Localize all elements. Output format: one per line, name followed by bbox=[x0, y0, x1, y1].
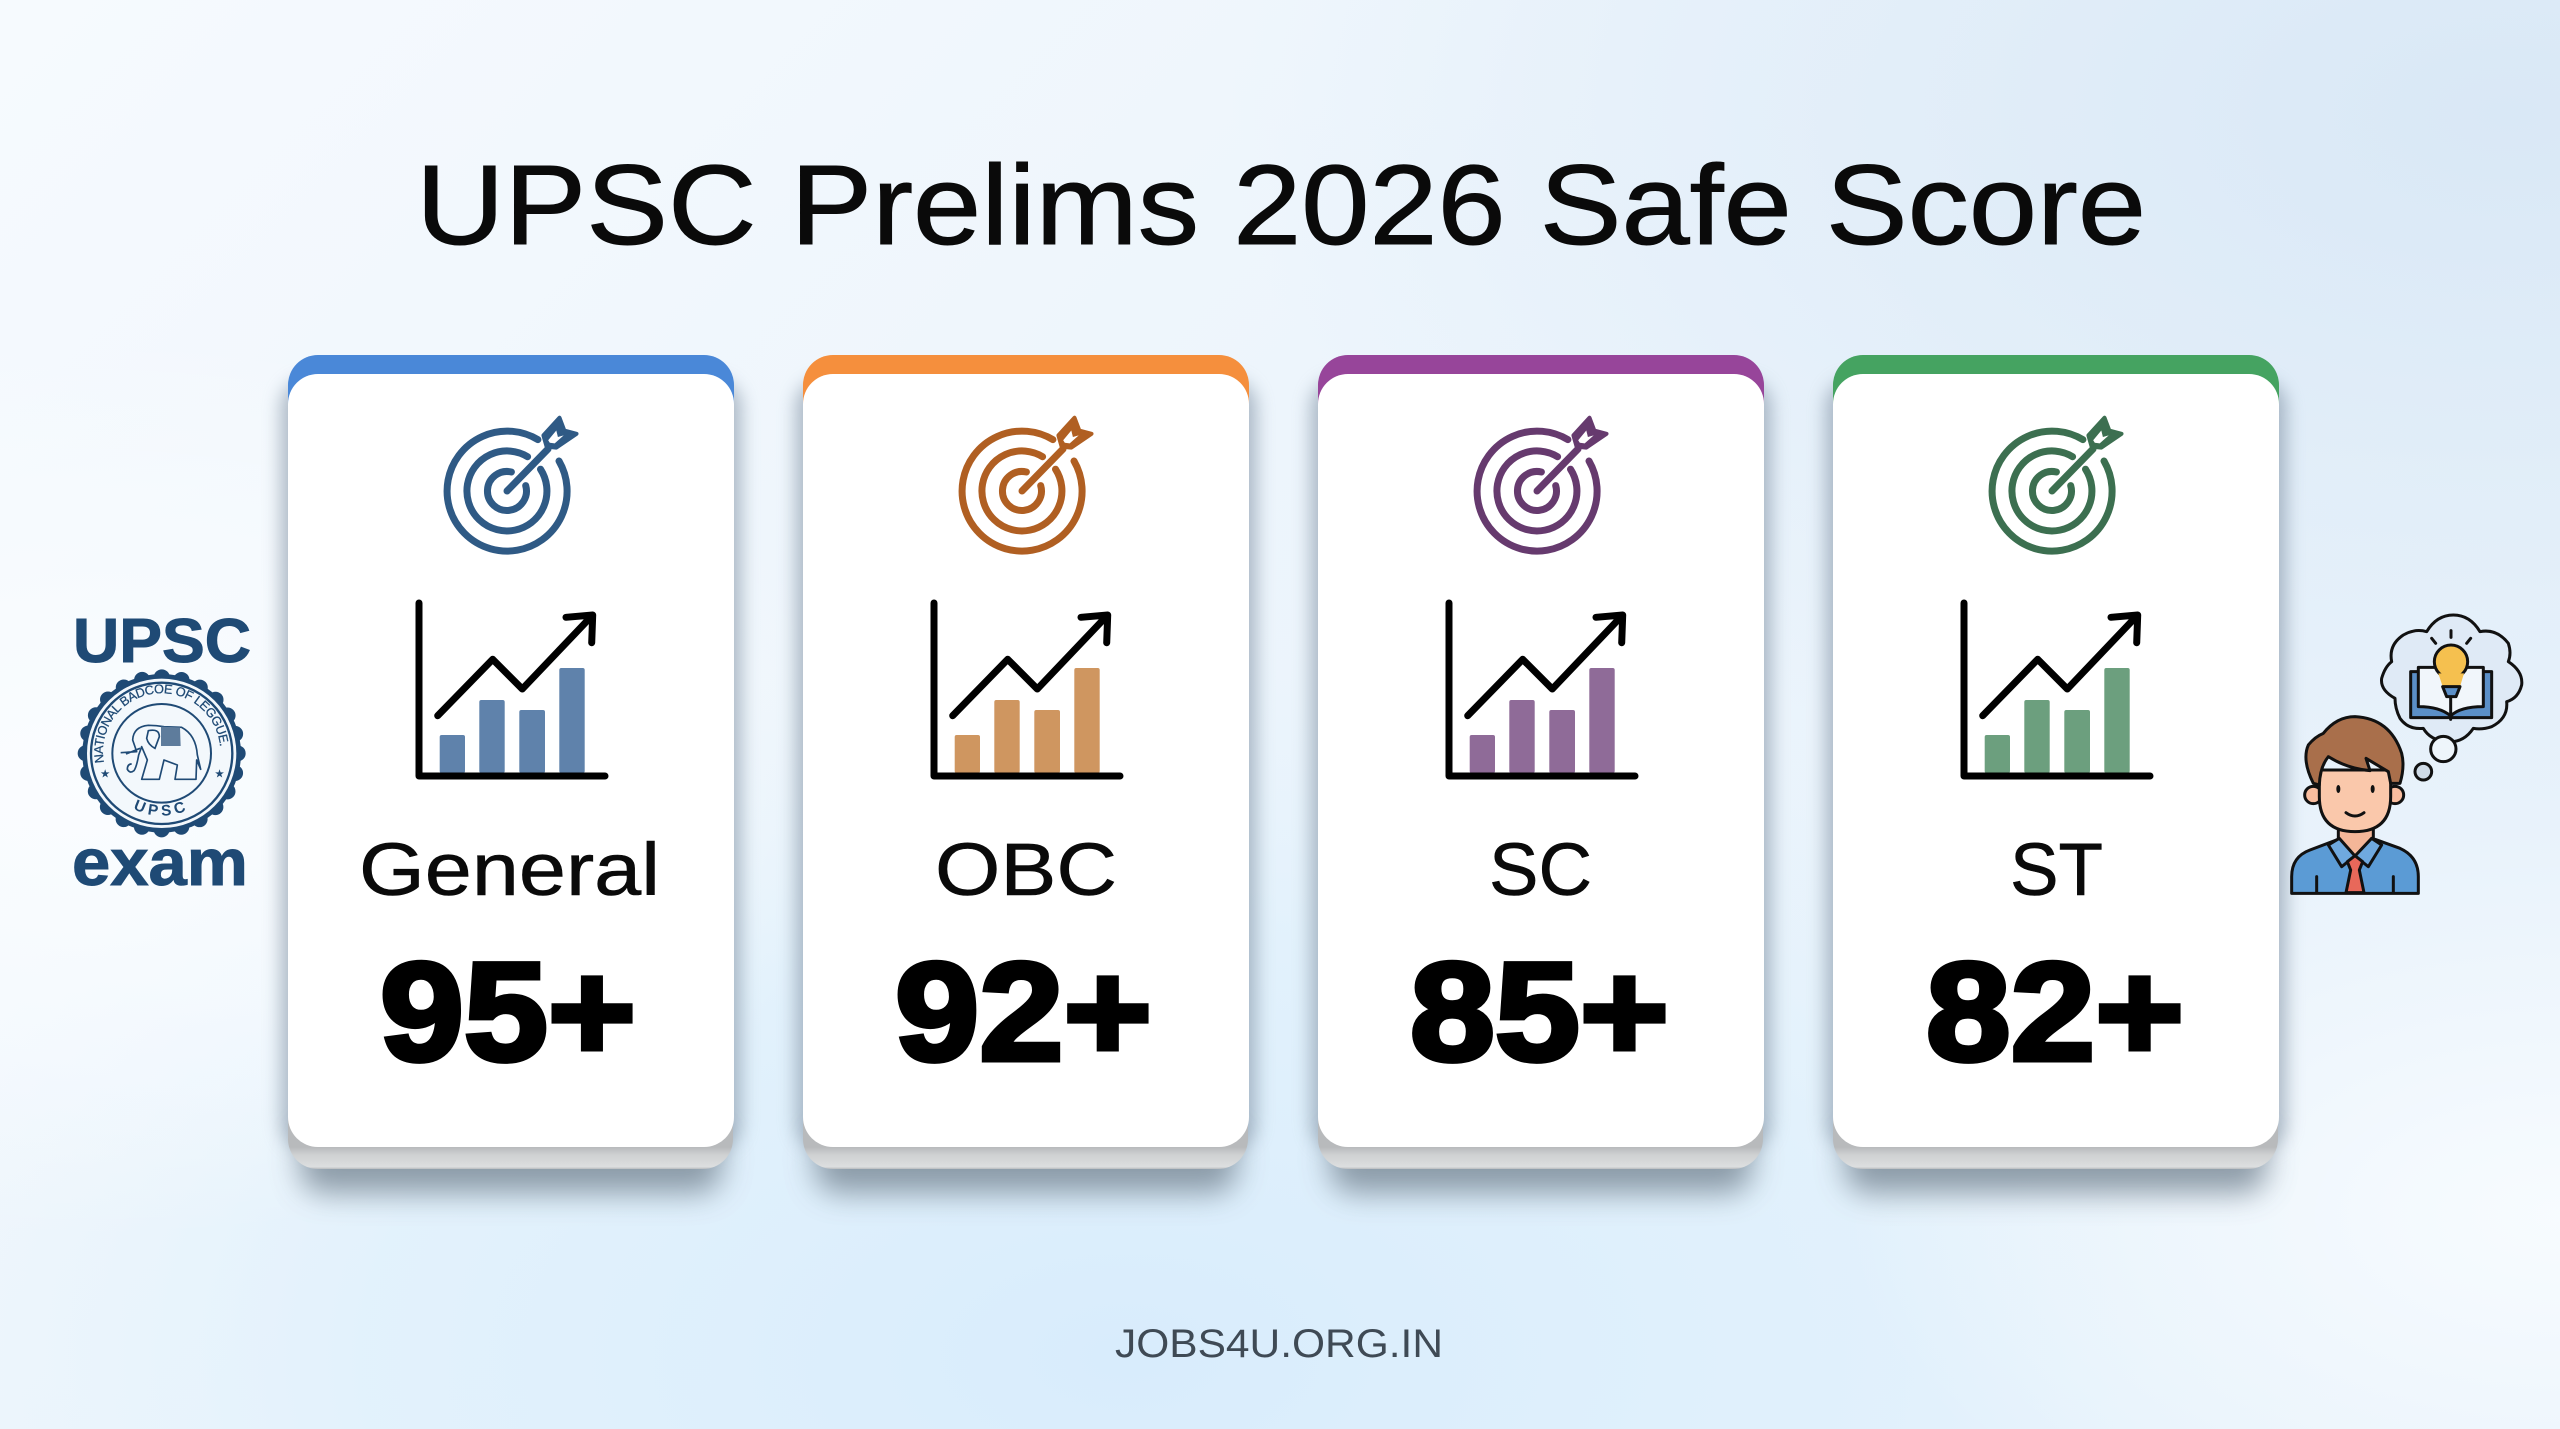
card shadow bbox=[1311, 380, 1771, 1193]
logo word: UPSC: UPSC bbox=[73, 607, 251, 676]
card face bbox=[1318, 374, 1764, 1147]
card base edge bbox=[1833, 500, 2278, 1169]
neck and collar bbox=[2338, 823, 2373, 857]
icon: target bbox=[962, 418, 1092, 551]
icon: elephant seal: UPSC bbox=[134, 800, 185, 816]
card shadow bbox=[1826, 380, 2286, 1193]
icon: target bbox=[1992, 418, 2122, 551]
icon: bar chart with trend arrow bbox=[934, 603, 1120, 776]
card shadow bbox=[281, 380, 741, 1193]
hair bbox=[2306, 717, 2403, 785]
eyes and smile bbox=[2336, 785, 2340, 793]
title: UPSC Prelims 2026 Safe Score bbox=[416, 142, 2146, 268]
panel: SC card bbox=[1311, 355, 1771, 1193]
thought bubbles bbox=[2415, 736, 2456, 780]
card base edge bbox=[1318, 500, 1763, 1169]
ears bbox=[2305, 786, 2322, 804]
footer: website: JOBS4U.ORG.IN bbox=[1115, 1322, 1443, 1366]
card face bbox=[1833, 374, 2279, 1147]
icon: target bbox=[1477, 418, 1606, 551]
icon: elephant seal: ★ bbox=[100, 768, 110, 780]
card face bbox=[288, 374, 734, 1147]
logo word: exam: exam bbox=[72, 825, 248, 899]
face bbox=[2319, 770, 2391, 832]
accent bar bbox=[288, 355, 734, 475]
book and light bulb bbox=[2411, 631, 2492, 719]
icon: bar chart with trend arrow bbox=[1964, 603, 2150, 776]
accent bar bbox=[803, 355, 1249, 475]
card base edge bbox=[288, 500, 733, 1169]
icon: bar chart with trend arrow bbox=[1449, 603, 1635, 776]
score: 85+ bbox=[1410, 933, 1669, 1090]
category label: General bbox=[359, 828, 660, 911]
icon: bar chart with trend arrow bbox=[419, 603, 605, 776]
panel: General card bbox=[281, 355, 741, 1193]
card shadow bbox=[796, 380, 1256, 1193]
card face bbox=[803, 374, 1249, 1147]
icon: elephant seal: NATIONAL BADCOE OF LEGGUE. bbox=[94, 684, 228, 763]
card base edge bbox=[803, 500, 1248, 1169]
accent bar bbox=[1833, 355, 2279, 475]
category label: ST bbox=[2010, 828, 2103, 911]
panel: ST card bbox=[1826, 355, 2286, 1193]
accent bar bbox=[1318, 355, 1764, 475]
category label: SC bbox=[1489, 828, 1592, 911]
score: 92+ bbox=[895, 933, 1152, 1090]
panel: OBC card bbox=[796, 355, 1256, 1193]
icon: elephant seal: ★ bbox=[214, 768, 224, 780]
icon: person thinking of book and idea bbox=[2292, 615, 2522, 893]
thought cloud bbox=[2381, 615, 2522, 742]
logo: UPSC exam seal bbox=[72, 607, 251, 899]
icon: elephant seal bbox=[78, 669, 246, 838]
score: 82+ bbox=[1926, 933, 2184, 1090]
tie bbox=[2346, 856, 2364, 893]
score: 95+ bbox=[380, 933, 636, 1090]
shirt bbox=[2292, 839, 2418, 893]
icon: target bbox=[447, 418, 576, 551]
category label: OBC bbox=[935, 828, 1117, 911]
